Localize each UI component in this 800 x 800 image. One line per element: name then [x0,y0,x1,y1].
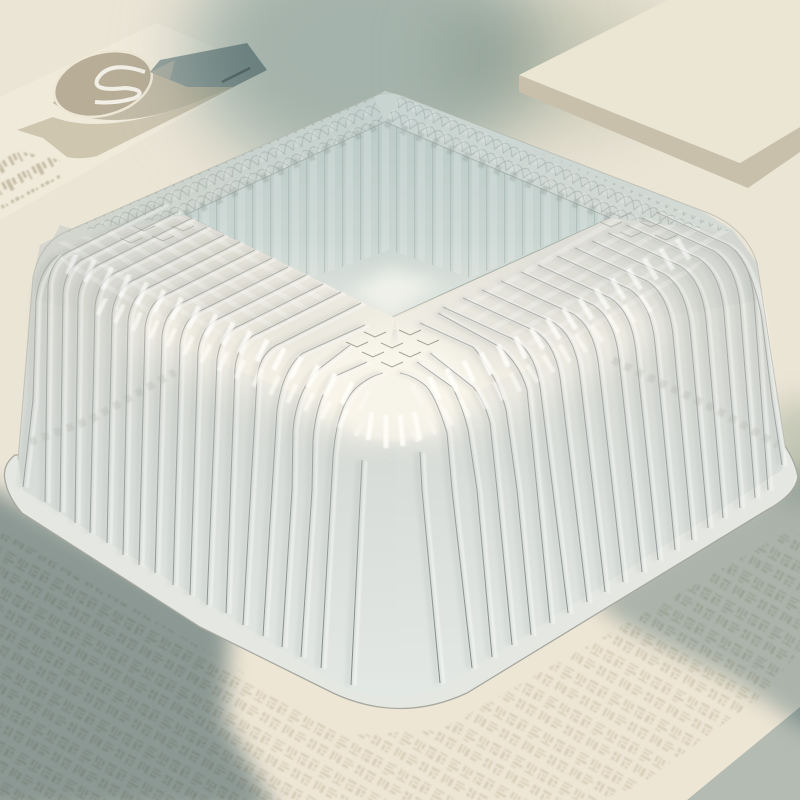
rib crest highlights, right row [415,245,690,397]
corner chevrons, left and right of rim [120,212,677,243]
ribs: left wall lines [23,204,383,685]
lit band glow, left [130,320,380,415]
tray hollow interior [185,122,610,318]
left wall [18,225,400,700]
tray [4,91,798,708]
lit band glow, right [405,315,660,415]
rib white edges, both walls [27,205,786,686]
reference sheet, upper left [0,23,267,220]
notebook, upper right [519,0,800,188]
rim: back left band [33,97,385,277]
rib crest highlights, left row [70,262,367,403]
newspaper under the tray [0,470,800,800]
see-through rim reflection, right [613,360,778,445]
ribs: right wall lines [400,212,782,683]
rim: front right band [395,218,760,425]
see-through crossing reflections [45,215,733,350]
rim: front left band [33,215,395,425]
notebook side edge [519,75,800,188]
tray silhouette outline [18,93,785,460]
centre fan highlights under the dome [368,412,420,448]
shadow: right edge near tray foot [765,400,800,500]
rib soft shading, both walls [20,204,779,685]
sheet: printed card [0,23,267,220]
shadow: lower left on the newspaper [0,470,277,800]
text: printed card lines [0,147,60,210]
shadow: top blob [190,0,540,180]
lit crest glow [307,333,477,437]
tray corner dome [352,374,436,441]
desk edge, lower right corner [687,707,800,800]
rib crest highlights, lower left row [100,305,373,433]
see-through rim reflection, left [30,372,175,442]
text: newspaper columns [0,530,800,800]
rim arches, back bands [63,95,733,233]
rib crest highlights, lower right row [412,295,660,435]
rim: back right band [373,91,757,263]
tray flange [4,443,798,708]
right wall [395,230,785,700]
shadow: lower right on the newspaper [590,440,800,750]
icon: handled pan graphic [17,40,267,158]
notebook cover [519,0,800,163]
sheet: newspaper page [0,470,800,800]
shadow: upper right behind notebook [450,0,670,130]
centre chevrons on the rim [346,330,439,367]
